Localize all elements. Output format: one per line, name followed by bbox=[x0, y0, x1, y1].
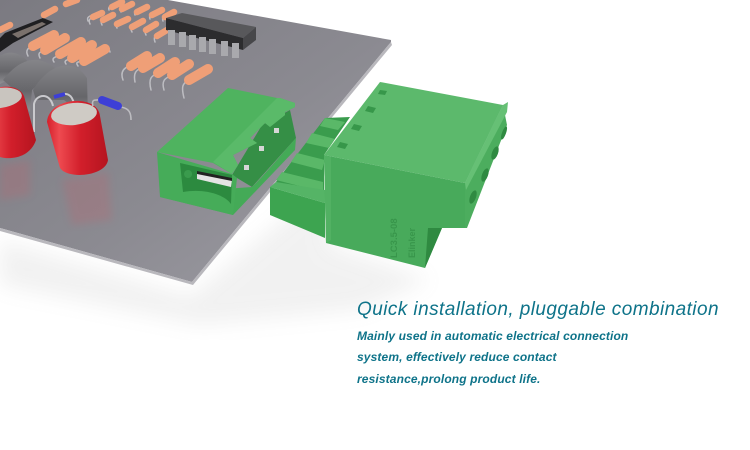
diode bbox=[92, 100, 131, 120]
board shadow bbox=[0, 180, 430, 325]
capacitor reflections bbox=[0, 160, 112, 225]
resistors bbox=[0, 0, 208, 98]
inductors bbox=[0, 53, 88, 132]
green plug bbox=[270, 82, 508, 268]
embossed marking bbox=[389, 218, 417, 258]
capacitors bbox=[0, 85, 108, 175]
capacitor left bbox=[0, 85, 36, 158]
heading: Quick installation, pluggable combination bbox=[357, 299, 719, 320]
integrated circuit bbox=[166, 13, 256, 58]
circuit board bbox=[0, 0, 392, 285]
line 1: Mainly used in automatic electrical connection bbox=[357, 329, 628, 343]
embossed marking: LC3.5-08 bbox=[389, 218, 400, 258]
green header on board bbox=[157, 88, 296, 215]
line 3: resistance,prolong product life. bbox=[357, 372, 541, 386]
metal box bbox=[0, 18, 53, 52]
embossed marking: Elinker bbox=[407, 227, 417, 258]
plug fingers bbox=[270, 117, 350, 238]
line 2: system, effectively reduce contact bbox=[357, 350, 557, 364]
capacitor right bbox=[47, 101, 108, 175]
body text bbox=[357, 329, 628, 386]
